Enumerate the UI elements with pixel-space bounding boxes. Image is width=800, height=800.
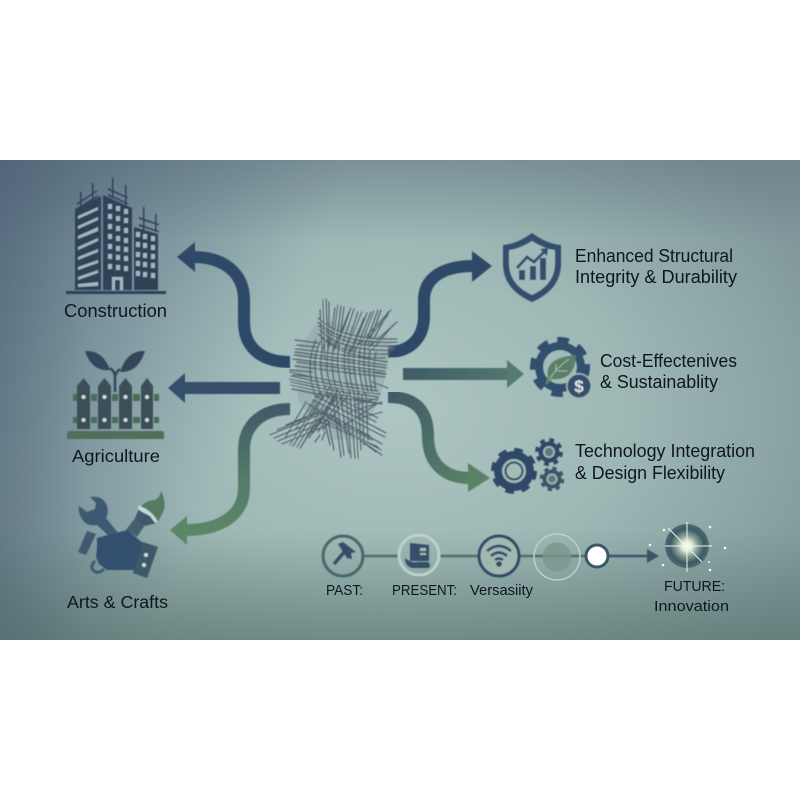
text: enhanced structural integrity — [575, 246, 737, 287]
icon: shield with growth chart — [503, 233, 561, 302]
icon: past hammer — [323, 536, 363, 576]
label: future innovation: Innovation — [654, 598, 729, 615]
icon: arts and crafts tools — [78, 491, 165, 578]
label: agriculture: Agriculture — [72, 446, 160, 466]
icon: versatility wifi — [479, 536, 519, 576]
text: enhanced structural integrity: Integrity & Durability — [575, 267, 737, 287]
ghost milestone circle — [534, 534, 580, 580]
icon: present blueprint scroll — [399, 535, 439, 575]
text: enhanced structural integrity: Enhanced Structural — [575, 246, 733, 266]
icon: construction buildings — [66, 178, 166, 294]
arrow: fiber to structural integrity — [388, 251, 492, 352]
text: cost effectiveness and sustainability: Cost-Effectenives — [600, 351, 737, 371]
timeline line and arrow — [363, 549, 659, 563]
arrow: fiber to construction — [177, 242, 290, 362]
icon: gear with leaf and dollar — [530, 337, 592, 399]
text: technology integration and design flexibility — [575, 441, 755, 483]
arrow: fiber to agriculture — [168, 373, 280, 403]
text: cost effectiveness and sustainability — [600, 351, 737, 392]
label: present: PRESENT: — [392, 582, 457, 599]
label: past: PAST: — [326, 582, 363, 599]
text: technology integration and design flexibility: & Design Flexibility — [575, 463, 725, 483]
label: future innovation — [654, 578, 729, 615]
text: technology integration and design flexibility: Technology Integration — [575, 441, 755, 461]
arrow: fiber to arts and crafts — [170, 409, 290, 545]
label: construction: Construction — [64, 301, 167, 321]
white milestone dot — [586, 545, 608, 567]
icon: gear with leaf and dollar: $ — [574, 377, 584, 396]
text: cost effectiveness and sustainability: & Sustainablity — [600, 372, 718, 392]
icon: technology gears — [494, 440, 562, 492]
label: future innovation: FUTURE: — [664, 578, 725, 595]
icon: future innovation burst — [649, 522, 726, 572]
central fiber bundle — [270, 299, 397, 458]
arrow: fiber to technology integration — [388, 397, 490, 492]
timeline — [323, 522, 729, 615]
arrow: fiber to cost effectiveness — [403, 360, 524, 388]
label: arts and crafts: Arts & Crafts — [67, 592, 168, 612]
background panel — [0, 160, 800, 640]
label: versatility: Versasiity — [470, 582, 533, 599]
icon: agriculture fence and sprout — [67, 351, 164, 439]
